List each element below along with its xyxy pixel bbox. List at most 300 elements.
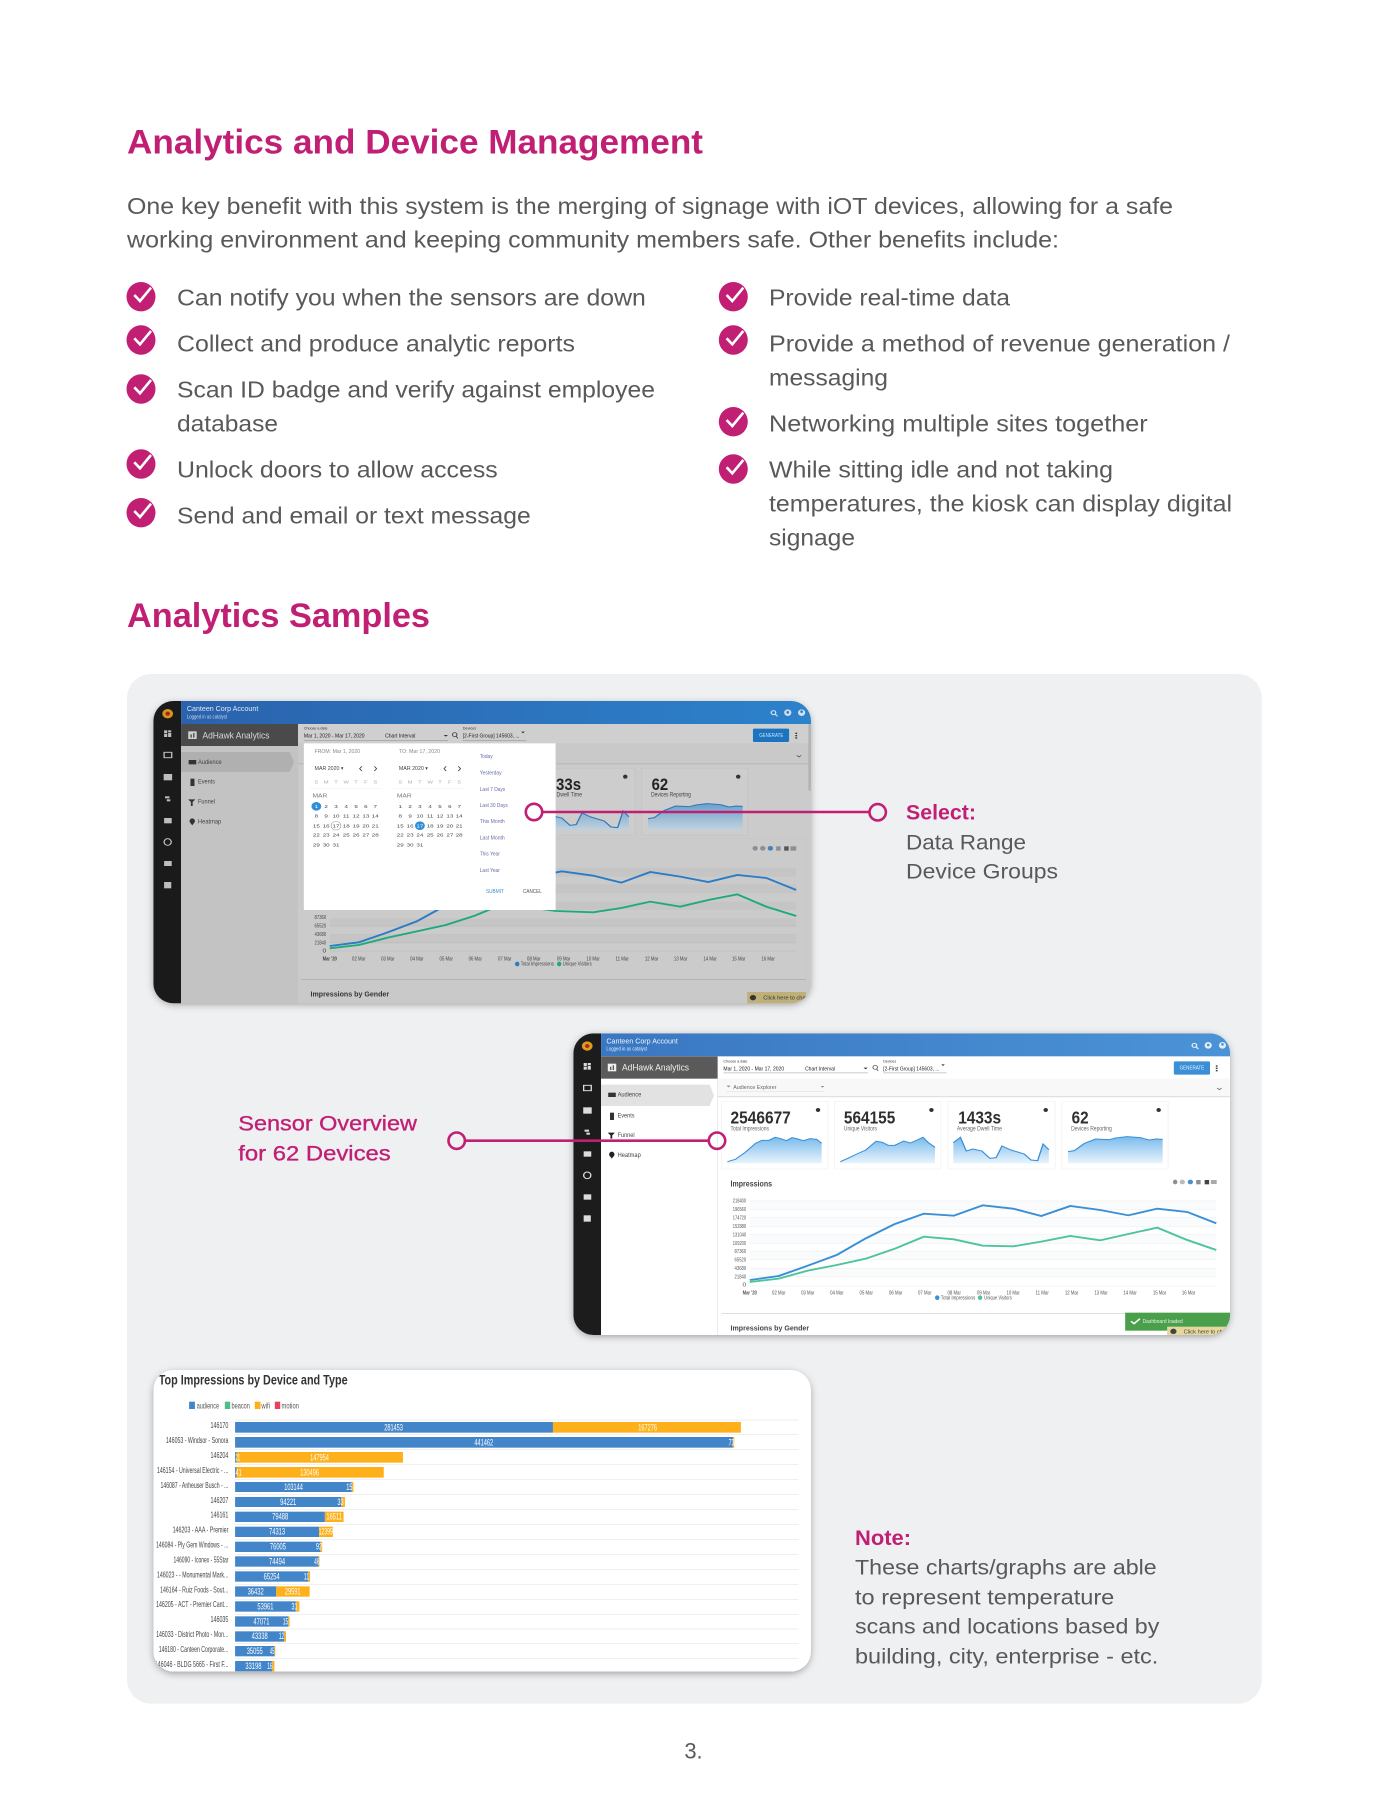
- line chart: impressions: 02 Mar: [772, 1291, 785, 1296]
- line chart: impressions dimmed: 11 Mar: [615, 957, 629, 962]
- calendar: right month: 13: [446, 814, 453, 819]
- bar value labels: 441462: [474, 1438, 493, 1448]
- list item: Can notify you when the sensors are down: [177, 285, 646, 311]
- bar value labels: 167276: [638, 1423, 657, 1433]
- side navigation: [181, 724, 298, 1003]
- bar value labels: 16511: [326, 1512, 342, 1522]
- calendar: left month: 3: [334, 805, 338, 810]
- calendar: right month: 17: [416, 824, 423, 829]
- preset ranges: This Year: [480, 851, 500, 857]
- line chart: impressions: [731, 1180, 1217, 1301]
- calendar: right month: S: [457, 780, 462, 785]
- line chart: impressions: 07 Mar: [918, 1291, 931, 1296]
- date range picker modal: FROM: Mar 1, 2020: [315, 750, 361, 755]
- bar value labels: 35055: [247, 1646, 263, 1657]
- list item: Collect and produce analytic reports: [177, 331, 575, 357]
- toast: dashboard loaded: [1125, 1313, 1230, 1331]
- screenshot: top impressions bar chart: [153, 1370, 811, 1673]
- line chart: impressions dimmed: 10 Mar: [586, 957, 600, 962]
- top bar: Logged in as catalyst: [187, 715, 227, 720]
- bar value labels: 43338: [252, 1631, 268, 1642]
- bar value labels: 15: [283, 1617, 288, 1627]
- calendar: right month: 3: [418, 805, 422, 810]
- bar value labels: 11: [304, 1572, 309, 1582]
- filter toolbar: Mar 1, 2020 - Mar 17, 2020: [304, 733, 365, 739]
- KPI card: devices reporting: [1062, 1102, 1168, 1169]
- calendar: right month: 24: [416, 833, 423, 838]
- list item: Scan ID badge and verify against employee: [177, 377, 655, 403]
- calendar: right month: 15: [397, 824, 404, 829]
- screenshot: top impressions bar chart: 146205 - ACT - Premier Cant...: [156, 1600, 228, 1610]
- section: impressions by gender: Impressions by Gender: [311, 990, 390, 998]
- calendar: right month: W: [427, 780, 433, 785]
- line chart: impressions: 152880: [733, 1225, 747, 1230]
- bars: orange wifi segments: [236, 1422, 741, 1671]
- filter toolbar: GENERATE: [1180, 1065, 1204, 1071]
- calendar: right month: 5: [438, 805, 442, 810]
- line chart: impressions dimmed: Mar '20: [323, 957, 337, 962]
- bar value labels: 76005: [270, 1542, 286, 1552]
- calendar: right month: 12: [437, 814, 443, 819]
- line chart: impressions: 43680: [735, 1267, 747, 1272]
- benefits list: left column: [126, 282, 655, 529]
- KPI card: devices reporting: Devices Reporting: [1071, 1125, 1112, 1132]
- note: to represent temperature: [855, 1585, 1114, 1609]
- date range picker modal: SUBMIT: [486, 889, 504, 895]
- calendar: left month: 9: [324, 814, 328, 819]
- bar value labels: 12: [279, 1631, 284, 1642]
- calendar: left month: W: [344, 780, 349, 785]
- callout connector: select: [526, 804, 886, 820]
- intro paragraph: One key benefit with this system is the merging of signage with iOT devices, allowing for a safe: [127, 193, 1173, 219]
- KPI card: unique visitors: 564155: [844, 1108, 895, 1128]
- calendar: left month: 20: [362, 824, 369, 829]
- top bar: Canteen Corp Account: [187, 704, 259, 713]
- calendar: left month: 11: [343, 814, 349, 819]
- calendar: right month: 7: [457, 805, 461, 810]
- side navigation: Audience: [198, 758, 222, 766]
- bar value labels: 16: [267, 1661, 273, 1672]
- line chart: impressions dimmed: 03 Mar: [381, 957, 394, 962]
- KPI card: devices reporting: [642, 768, 748, 835]
- callout text: sensor overview: for 62 Devices: [238, 1142, 391, 1166]
- heading: Analytics Samples: Analytics Samples: [127, 597, 430, 635]
- icon: check: [126, 374, 156, 404]
- preset ranges: Last 30 Days: [480, 803, 508, 809]
- KPI card: total impressions: Total Impressions: [731, 1125, 769, 1132]
- callout text: select: Data Range: [906, 830, 1026, 854]
- line chart: impressions dimmed: 16 Mar: [761, 957, 775, 962]
- audience explorer strip: Audience Explorer: [733, 1085, 777, 1091]
- page number: 3.: [684, 1738, 703, 1764]
- calendar: right month: 4: [428, 805, 432, 810]
- line chart: impressions: 14 Mar: [1123, 1291, 1137, 1296]
- bar value labels: 15: [346, 1482, 353, 1493]
- bar value labels: 47071: [253, 1617, 270, 1627]
- bar value labels: 147954: [310, 1453, 329, 1463]
- screenshot: top impressions bar chart: 146023 - - Monumental Mark...: [157, 1571, 228, 1580]
- note: [855, 1526, 1160, 1668]
- screenshot: top impressions bar chart: 146180 - Canteen Corporate...: [159, 1645, 228, 1655]
- callout connector: sensor overview: [448, 1132, 725, 1149]
- calendar: left month: 29: [313, 843, 320, 848]
- icon: check: [126, 282, 156, 311]
- note: These charts/graphs are able: [855, 1555, 1157, 1579]
- line chart: impressions dimmed: 65520: [315, 924, 327, 929]
- line chart: impressions: Mar '20: [743, 1291, 757, 1296]
- screenshot: top impressions bar chart: 146033 - District Photo - Mon...: [156, 1630, 228, 1640]
- preset ranges: Last Month: [480, 835, 505, 841]
- calendar: right month: 16: [407, 824, 414, 829]
- intro paragraph: [126, 193, 1173, 253]
- section: impressions by gender: Impressions by Gender: [731, 1324, 810, 1332]
- bars: blue audience segments: [235, 1422, 733, 1671]
- panel: analytics samples background: [127, 674, 1262, 1704]
- line chart: impressions: 04 Mar: [830, 1291, 844, 1296]
- line chart: impressions: 03 Mar: [801, 1291, 814, 1296]
- calendar: left month: 24: [333, 833, 339, 838]
- calendar: right month: 29: [397, 843, 404, 848]
- note: building, city, enterprise - etc.: [855, 1644, 1158, 1668]
- device labels: [155, 1421, 229, 1670]
- list item: Provide a method of revenue generation /: [769, 331, 1231, 357]
- callout text: select: [906, 800, 1058, 884]
- calendar: right month: 8: [399, 814, 402, 819]
- side navigation: AdHawk Analytics: [622, 1063, 689, 1073]
- calendar: right month: T: [418, 780, 422, 785]
- icon: check: [719, 325, 748, 355]
- calendar: right month: 18: [427, 824, 434, 829]
- line chart: impressions: 10 Mar: [1006, 1291, 1020, 1296]
- list item: database: [177, 411, 278, 437]
- bar value labels: 103144: [284, 1482, 303, 1493]
- screenshot: date picker dashboard: [153, 701, 811, 1004]
- callout text: select: Device Groups: [906, 860, 1058, 884]
- device labels: 146203 - AAA - Premier: [173, 1526, 228, 1535]
- KPI card: unique visitors: [835, 1102, 941, 1169]
- line chart: impressions: 16 Mar: [1182, 1291, 1195, 1296]
- bar value labels: 33: [337, 1497, 344, 1508]
- device labels: 146204: [211, 1451, 228, 1461]
- line chart: impressions dimmed: 43680: [315, 933, 327, 938]
- calendar: left month: 5: [354, 805, 358, 810]
- date range picker modal: TO: Mar 17, 2020: [399, 750, 441, 755]
- legend: audience: [197, 1402, 219, 1411]
- line chart: impressions: 13 Mar: [1094, 1291, 1108, 1296]
- calendar: left month: T: [334, 780, 338, 785]
- screenshot: top impressions bar chart: 146084 - Ply Gem Windows - ...: [156, 1541, 228, 1550]
- line chart: impressions: 08 Mar: [948, 1291, 961, 1296]
- line chart: impressions dimmed: 05 Mar: [440, 957, 453, 962]
- filter toolbar: [298, 724, 811, 743]
- top bar: Canteen Corp Account: [606, 1037, 678, 1045]
- calendar: left month: 28: [372, 833, 379, 838]
- icon: check: [719, 454, 748, 484]
- calendar: left month: S: [314, 780, 319, 785]
- KPI card: devices reporting: 62: [1072, 1108, 1089, 1128]
- calendar: left month: 2: [324, 805, 328, 810]
- line chart: impressions: 05 Mar: [860, 1291, 873, 1296]
- calendar: right month: T: [438, 780, 442, 785]
- icon rail: [153, 701, 181, 1003]
- line chart: impressions: 196560: [733, 1208, 747, 1213]
- calendar: right month: 31: [416, 843, 423, 848]
- screenshot: top impressions bar chart: 146046 - BLDG 5665 - First F...: [155, 1660, 228, 1670]
- calendar: right month: 6: [448, 805, 452, 810]
- calendar: left month: 10: [333, 814, 339, 819]
- list item: [769, 331, 1231, 391]
- calendar: left month: 13: [362, 814, 369, 819]
- screenshot: top impressions bar chart: 146053 - Windsor - Sonora: [166, 1436, 229, 1446]
- top bar: [601, 1033, 1230, 1056]
- calendar: right month: 27: [446, 833, 453, 838]
- KPI card: dwell time: 33s: [556, 776, 581, 794]
- calendar: left month: 15: [313, 824, 320, 829]
- preset ranges: [480, 754, 508, 874]
- line chart: impressions: 218400: [733, 1199, 747, 1204]
- chat prompt: Click here to ch: [1184, 1329, 1223, 1335]
- calendar: right month: 14: [456, 814, 463, 819]
- KPI card: dwell time: [556, 774, 630, 830]
- side navigation: Audience: [618, 1091, 642, 1098]
- calendar: right month: F: [448, 780, 452, 785]
- line chart: impressions dimmed: Total Impressions: [521, 962, 554, 967]
- callout text: select: Select:: [906, 800, 976, 824]
- side navigation: Heatmap: [618, 1151, 641, 1159]
- filter toolbar: Chart Interval: [805, 1066, 835, 1072]
- KPI card: average dwell time: [948, 1102, 1055, 1169]
- side navigation: Events: [618, 1111, 635, 1119]
- line chart: impressions: 87360: [735, 1250, 747, 1255]
- line chart: impressions dimmed: 09 Mar: [557, 957, 570, 962]
- calendar: right month: 1: [399, 805, 402, 810]
- calendar: left month: 22: [313, 833, 320, 838]
- side navigation: AdHawk Analytics: [203, 731, 270, 741]
- list item: messaging: [769, 365, 888, 391]
- section: impressions by gender: Click here to cha: [763, 995, 806, 1001]
- KPI card: total impressions: [722, 1102, 828, 1169]
- filter toolbar: Mar 1, 2020 - Mar 17, 2020: [723, 1066, 784, 1072]
- KPI card: average dwell time: 1433s: [958, 1108, 1001, 1128]
- side navigation: [601, 1056, 718, 1335]
- screenshot: sensor overview dashboard: [573, 1033, 1230, 1336]
- KPI card: dwell time: Dwell Time: [557, 792, 582, 798]
- line chart: impressions: Total Impressions: [941, 1296, 975, 1301]
- side navigation: Funnel: [618, 1131, 635, 1139]
- calendar: left month: 17: [333, 824, 339, 829]
- line chart: impressions dimmed: 0: [322, 949, 327, 954]
- calendar: right month: 22: [397, 833, 404, 838]
- toast: dashboard loaded: Dashboard loaded: [1143, 1319, 1183, 1325]
- calendar: left month: 6: [364, 805, 368, 810]
- bar value labels: 41: [236, 1468, 242, 1478]
- filter toolbar: GENERATE: [759, 733, 783, 739]
- list item: While sitting idle and not taking: [769, 457, 1113, 483]
- screenshot: top impressions bar chart: 146164 - Ruiz Foods - Sout...: [160, 1586, 228, 1595]
- bar value labels: 31: [291, 1602, 298, 1612]
- intro paragraph: working environment and keeping community members safe. Other benefits include:: [126, 227, 1059, 253]
- line chart: impressions dimmed: 13 Mar: [674, 957, 687, 962]
- callout text: sensor overview: [238, 1112, 418, 1166]
- calendar: right month: 30: [407, 843, 414, 848]
- date range picker modal: MAR 2020 ▾: [315, 766, 344, 772]
- calendar: left month: 26: [353, 833, 360, 838]
- calendar: right month: 11: [427, 814, 433, 819]
- calendar: right month: 28: [456, 833, 463, 838]
- line chart: impressions dimmed: 15 Mar: [732, 957, 745, 962]
- list item: Provide real-time data: [769, 285, 1010, 311]
- bar value labels: 281453: [384, 1423, 403, 1433]
- screenshot: top impressions bar chart: 146087 - Anheuser Busch - ...: [161, 1481, 228, 1491]
- section: impressions by gender: [298, 979, 811, 1003]
- calendar: left month: [310, 780, 382, 848]
- bar value labels: 79488: [272, 1512, 288, 1522]
- line chart: impressions: 109200: [733, 1242, 747, 1247]
- calendar: left month: 1: [315, 805, 318, 810]
- calendar: left month: 16: [323, 824, 330, 829]
- line chart: impressions dimmed: [314, 846, 797, 966]
- calendar: right month: M: [408, 780, 413, 785]
- line chart: impressions dimmed: 07 Mar: [498, 957, 511, 962]
- line chart: impressions dimmed: 21840: [315, 941, 327, 946]
- side navigation: Events: [198, 778, 215, 785]
- line chart: impressions: 09 Mar: [977, 1291, 990, 1296]
- date range picker modal: [304, 743, 556, 911]
- bar value labels: 45: [270, 1646, 274, 1657]
- device labels: 146035: [211, 1615, 228, 1625]
- list item: Networking multiple sites together: [769, 411, 1148, 437]
- line chart: impressions: 131040: [733, 1233, 747, 1238]
- heading: Analytics and Device Management: Analytics and Device Management: [127, 124, 703, 162]
- icon rail: [573, 1033, 601, 1335]
- date range picker modal: CANCEL: [523, 889, 542, 895]
- line chart: impressions dimmed: 87360: [315, 916, 327, 921]
- calendar: right month: 25: [427, 833, 434, 838]
- line chart: impressions: 15 Mar: [1153, 1291, 1166, 1296]
- list item: [177, 377, 655, 437]
- filter toolbar: Devices: [883, 1059, 897, 1064]
- device labels: 146170: [211, 1421, 228, 1431]
- calendar: right month: 9: [408, 814, 412, 819]
- screenshot: top impressions bar chart: 146154 - Universal Electric - ...: [157, 1466, 228, 1476]
- bar value labels: 92: [316, 1542, 322, 1552]
- line chart: impressions dimmed: 02 Mar: [352, 957, 365, 962]
- list item: signage: [769, 525, 855, 551]
- note: scans and locations based by: [855, 1614, 1160, 1638]
- line chart: impressions: 174720: [733, 1216, 747, 1221]
- calendar: left month: 19: [353, 824, 360, 829]
- icon: check: [126, 498, 156, 527]
- calendar: left month: F: [364, 780, 368, 785]
- calendar: left month: S: [373, 780, 378, 785]
- calendar: left month: 4: [345, 805, 348, 810]
- chat prompt: [1167, 1327, 1227, 1335]
- top bar: [181, 701, 811, 724]
- legend: [189, 1402, 299, 1409]
- line chart: impressions: 11 Mar: [1035, 1291, 1049, 1296]
- bar value labels: 130496: [300, 1468, 319, 1478]
- calendar: left month: 18: [343, 824, 350, 829]
- KPI card: devices reporting: Devices Reporting: [651, 792, 691, 798]
- calendar: right month: 2: [408, 805, 412, 810]
- calendar: right month: 19: [437, 824, 443, 829]
- bar value labels: 65254: [264, 1572, 280, 1582]
- filter toolbar: [2-First Group] 145603, ...: [463, 733, 520, 739]
- calendar: left month: M: [324, 780, 329, 785]
- line chart: impressions dimmed: 06 Mar: [469, 957, 482, 962]
- preset ranges: This Month: [480, 819, 505, 825]
- bar value labels: 21: [236, 1453, 240, 1463]
- KPI card: devices reporting: 62: [652, 776, 668, 794]
- calendar: left month: 14: [372, 814, 379, 819]
- filter toolbar: [723, 1059, 1218, 1075]
- side navigation: Heatmap: [198, 817, 222, 825]
- bar value labels: 36432: [248, 1587, 264, 1597]
- list item: Send and email or text message: [177, 503, 531, 529]
- legend: motion: [282, 1402, 299, 1411]
- icon: check: [719, 407, 748, 436]
- KPI card: unique visitors: Unique Visitors: [844, 1125, 877, 1132]
- line chart: impressions: 21840: [735, 1275, 747, 1280]
- line chart: impressions dimmed: 08 Mar: [527, 957, 540, 962]
- line chart: impressions: 06 Mar: [889, 1291, 902, 1296]
- line chart: impressions: 0: [742, 1283, 747, 1288]
- date range picker modal: MAR 2020 ▾: [399, 766, 428, 772]
- calendar: left month: 8: [315, 814, 318, 819]
- icon: check: [719, 282, 748, 311]
- calendar: left month: MAR: [312, 794, 327, 799]
- callout text: sensor overview: Sensor Overview: [238, 1112, 418, 1136]
- audience explorer strip: [718, 1085, 1230, 1098]
- bar value labels: 74313: [269, 1527, 285, 1537]
- bar value labels: 12399: [319, 1527, 333, 1537]
- KPI card: total impressions: 2546677: [731, 1108, 791, 1128]
- line chart: impressions: 65520: [735, 1258, 747, 1263]
- calendar: right month: [394, 780, 466, 848]
- calendar: left month: 27: [362, 833, 369, 838]
- bar value labels: 74494: [269, 1557, 285, 1567]
- device labels: 146207: [211, 1496, 228, 1506]
- bar value labels: [236, 1423, 734, 1672]
- preset ranges: Last 7 Days: [480, 787, 505, 793]
- bar value labels: 94221: [280, 1497, 296, 1508]
- gridlines: [235, 1420, 798, 1658]
- line chart: impressions: Impressions: [731, 1180, 772, 1189]
- filter toolbar: Choose a date: [304, 726, 328, 731]
- note: Note:: [855, 1526, 911, 1550]
- calendar: left month: 21: [372, 824, 379, 829]
- line chart: impressions: Unique Visitors: [984, 1296, 1012, 1301]
- benefits list: right column: [719, 282, 1232, 551]
- calendar: right month: 26: [437, 833, 443, 838]
- line chart: impressions dimmed: Unique Visitors: [563, 962, 592, 967]
- chart title: Top Impressions by Device and Type: [159, 1372, 348, 1388]
- KPI card: average dwell time: Average Dwell Time: [957, 1125, 1002, 1132]
- line chart: impressions: 12 Mar: [1065, 1291, 1078, 1296]
- line chart: impressions dimmed: 14 Mar: [703, 957, 717, 962]
- bar value labels: 33198: [245, 1661, 261, 1672]
- icon: check: [126, 325, 156, 355]
- calendar: right month: 20: [446, 824, 453, 829]
- line chart: impressions dimmed: 12 Mar: [645, 957, 658, 962]
- icon: check: [126, 449, 156, 479]
- top bar: Logged in as catalyst: [606, 1047, 647, 1052]
- filter toolbar: Choose a date: [723, 1059, 748, 1064]
- calendar: left month: 31: [333, 843, 339, 848]
- list item: [769, 457, 1232, 551]
- calendar: left month: 30: [323, 843, 330, 848]
- calendar: left month: 23: [323, 833, 330, 838]
